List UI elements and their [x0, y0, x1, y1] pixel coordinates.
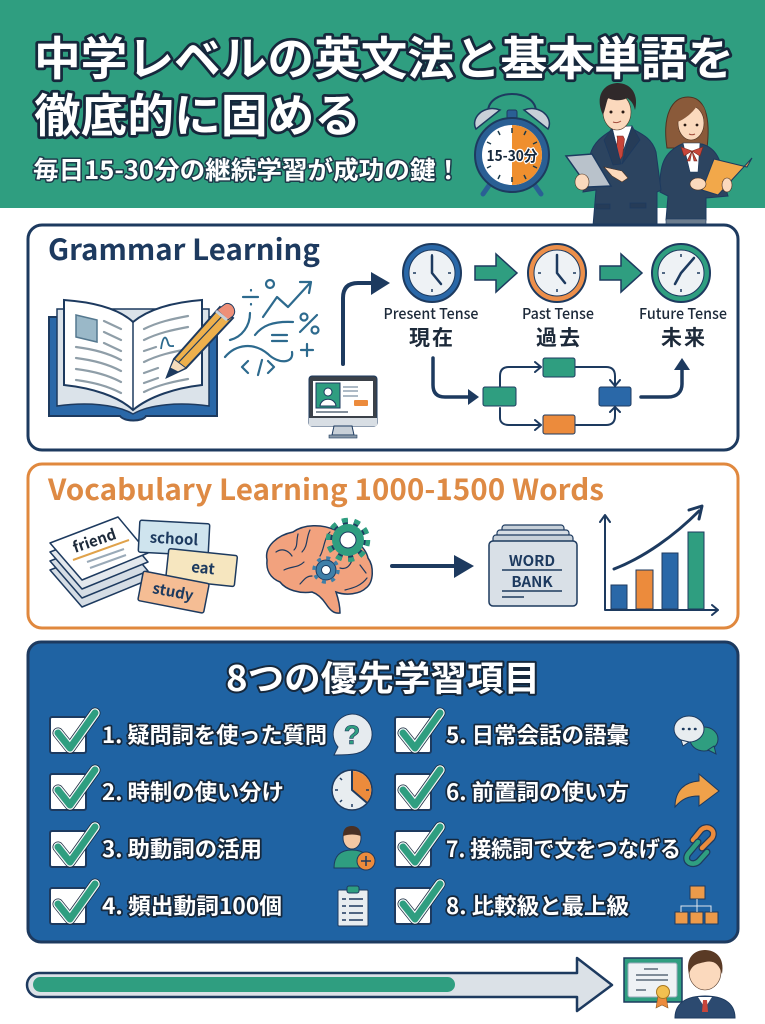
- icon: flash cards: school: [149, 527, 199, 550]
- label: past tense: Past Tense: [522, 303, 594, 324]
- icon: person plus: [334, 826, 375, 870]
- label: present tense: 現在: [409, 322, 453, 352]
- icon: alarm clock: 15-30分: [486, 145, 538, 166]
- item 3: 3. 助動詞の活用: [102, 832, 262, 864]
- item 1: [50, 713, 327, 753]
- icon: clipboard: [338, 886, 368, 926]
- label: past tense: [522, 303, 594, 352]
- icon: flash cards: eat: [190, 556, 216, 579]
- label: past tense: 過去: [536, 322, 580, 352]
- icon: open book and pencil: [49, 300, 235, 420]
- icon: hierarchy: [675, 886, 718, 924]
- clock: present tense: [403, 244, 461, 302]
- icon: question bubble: [333, 714, 372, 755]
- item 4: 4. 頻出動詞100個: [102, 889, 282, 921]
- icon: clock: [332, 770, 372, 810]
- item 6: 6. 前置詞の使い方: [446, 775, 629, 807]
- icon: curved arrow: [675, 774, 719, 807]
- icon: flash cards: friend: [70, 523, 119, 558]
- title: [34, 23, 734, 146]
- item 8: 8. 比較級と最上級: [446, 889, 629, 921]
- illustration: students: [566, 83, 752, 226]
- icon: certificate: [624, 958, 682, 1008]
- subtitle: 毎日15-30分の継続学習が成功の鍵！: [33, 151, 461, 187]
- item 6: [395, 770, 629, 810]
- arrow: past to future: [600, 254, 642, 292]
- arrow: brain to word bank: [392, 555, 474, 578]
- item 4: [50, 884, 282, 924]
- icon: chat bubbles: [674, 716, 718, 754]
- label: future tense: 未来: [661, 322, 705, 352]
- heading: grammar: Grammar Learning: [48, 227, 320, 269]
- icon: graduate: [675, 950, 735, 1018]
- label: future tense: [639, 303, 727, 352]
- item 3: [50, 827, 262, 867]
- item 7: [395, 827, 681, 867]
- title: 徹底的に固める: [34, 80, 361, 146]
- title: 中学レベルの英文法と基本単語を: [34, 23, 734, 89]
- clock: future tense: [652, 244, 710, 302]
- header band: [0, 0, 765, 208]
- icon: question bubble: ?: [344, 720, 360, 750]
- label: future tense: Future Tense: [639, 303, 727, 324]
- label: present tense: Present Tense: [384, 303, 478, 324]
- heading: vocabulary: Vocabulary Learning 1000-1500 Words: [47, 467, 604, 509]
- icon: monitor: [309, 376, 377, 438]
- icon: word bank: WORD: [509, 550, 555, 571]
- girl: [660, 97, 752, 226]
- label: present tense: [384, 303, 478, 352]
- panel: eight priority items: [28, 642, 738, 942]
- progress arrow: [27, 958, 612, 1011]
- icon: word bank: BANK: [511, 571, 553, 592]
- boy: [566, 83, 661, 226]
- panel: vocabulary learning: [28, 464, 738, 628]
- panel: grammar learning: [28, 225, 738, 450]
- icon: alarm clock: [475, 94, 549, 194]
- item 5: [395, 713, 629, 753]
- icon: chain link: [687, 828, 713, 864]
- item 1: 1. 疑問詞を使った質問: [102, 718, 327, 750]
- icon: flash cards: [50, 517, 237, 613]
- item 2: [50, 770, 284, 810]
- item 8: [395, 884, 629, 924]
- item 2: 2. 時制の使い分け: [102, 775, 284, 807]
- arrow: present to past: [475, 254, 517, 292]
- icon: math doodles: [225, 280, 318, 375]
- flow diagram: [433, 358, 690, 434]
- arrow: monitor to tenses: [343, 272, 390, 364]
- icon: brain with gears: [267, 520, 372, 613]
- heading: priorities: 8つの優先学習項目: [226, 651, 540, 702]
- chart: rising bars: [600, 506, 718, 615]
- icon: word bank: [489, 525, 577, 606]
- item 5: 5. 日常会話の語彙: [446, 718, 629, 750]
- clock: past tense: [528, 244, 586, 302]
- icon: flash cards: study: [151, 577, 196, 606]
- item 7: 7. 接続詞で文をつなげる: [446, 832, 681, 864]
